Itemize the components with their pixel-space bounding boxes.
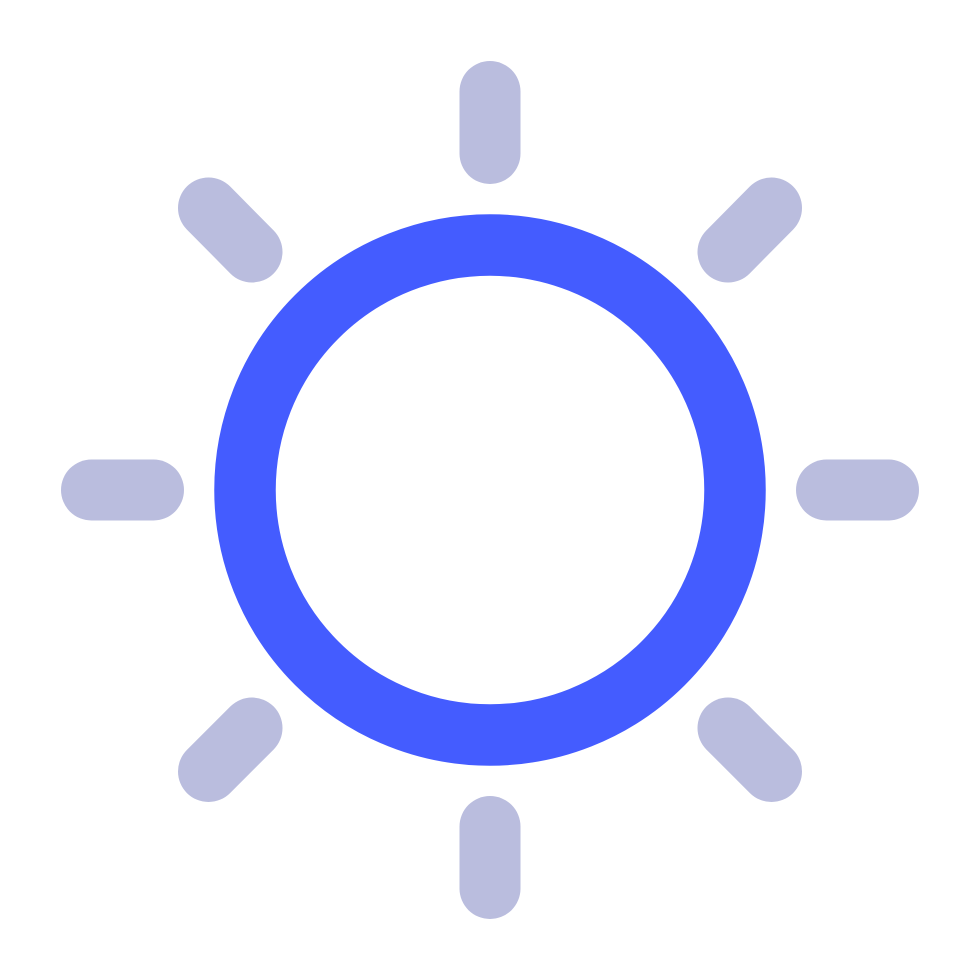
sun ring (245, 245, 735, 735)
sun rays (92, 92, 888, 888)
